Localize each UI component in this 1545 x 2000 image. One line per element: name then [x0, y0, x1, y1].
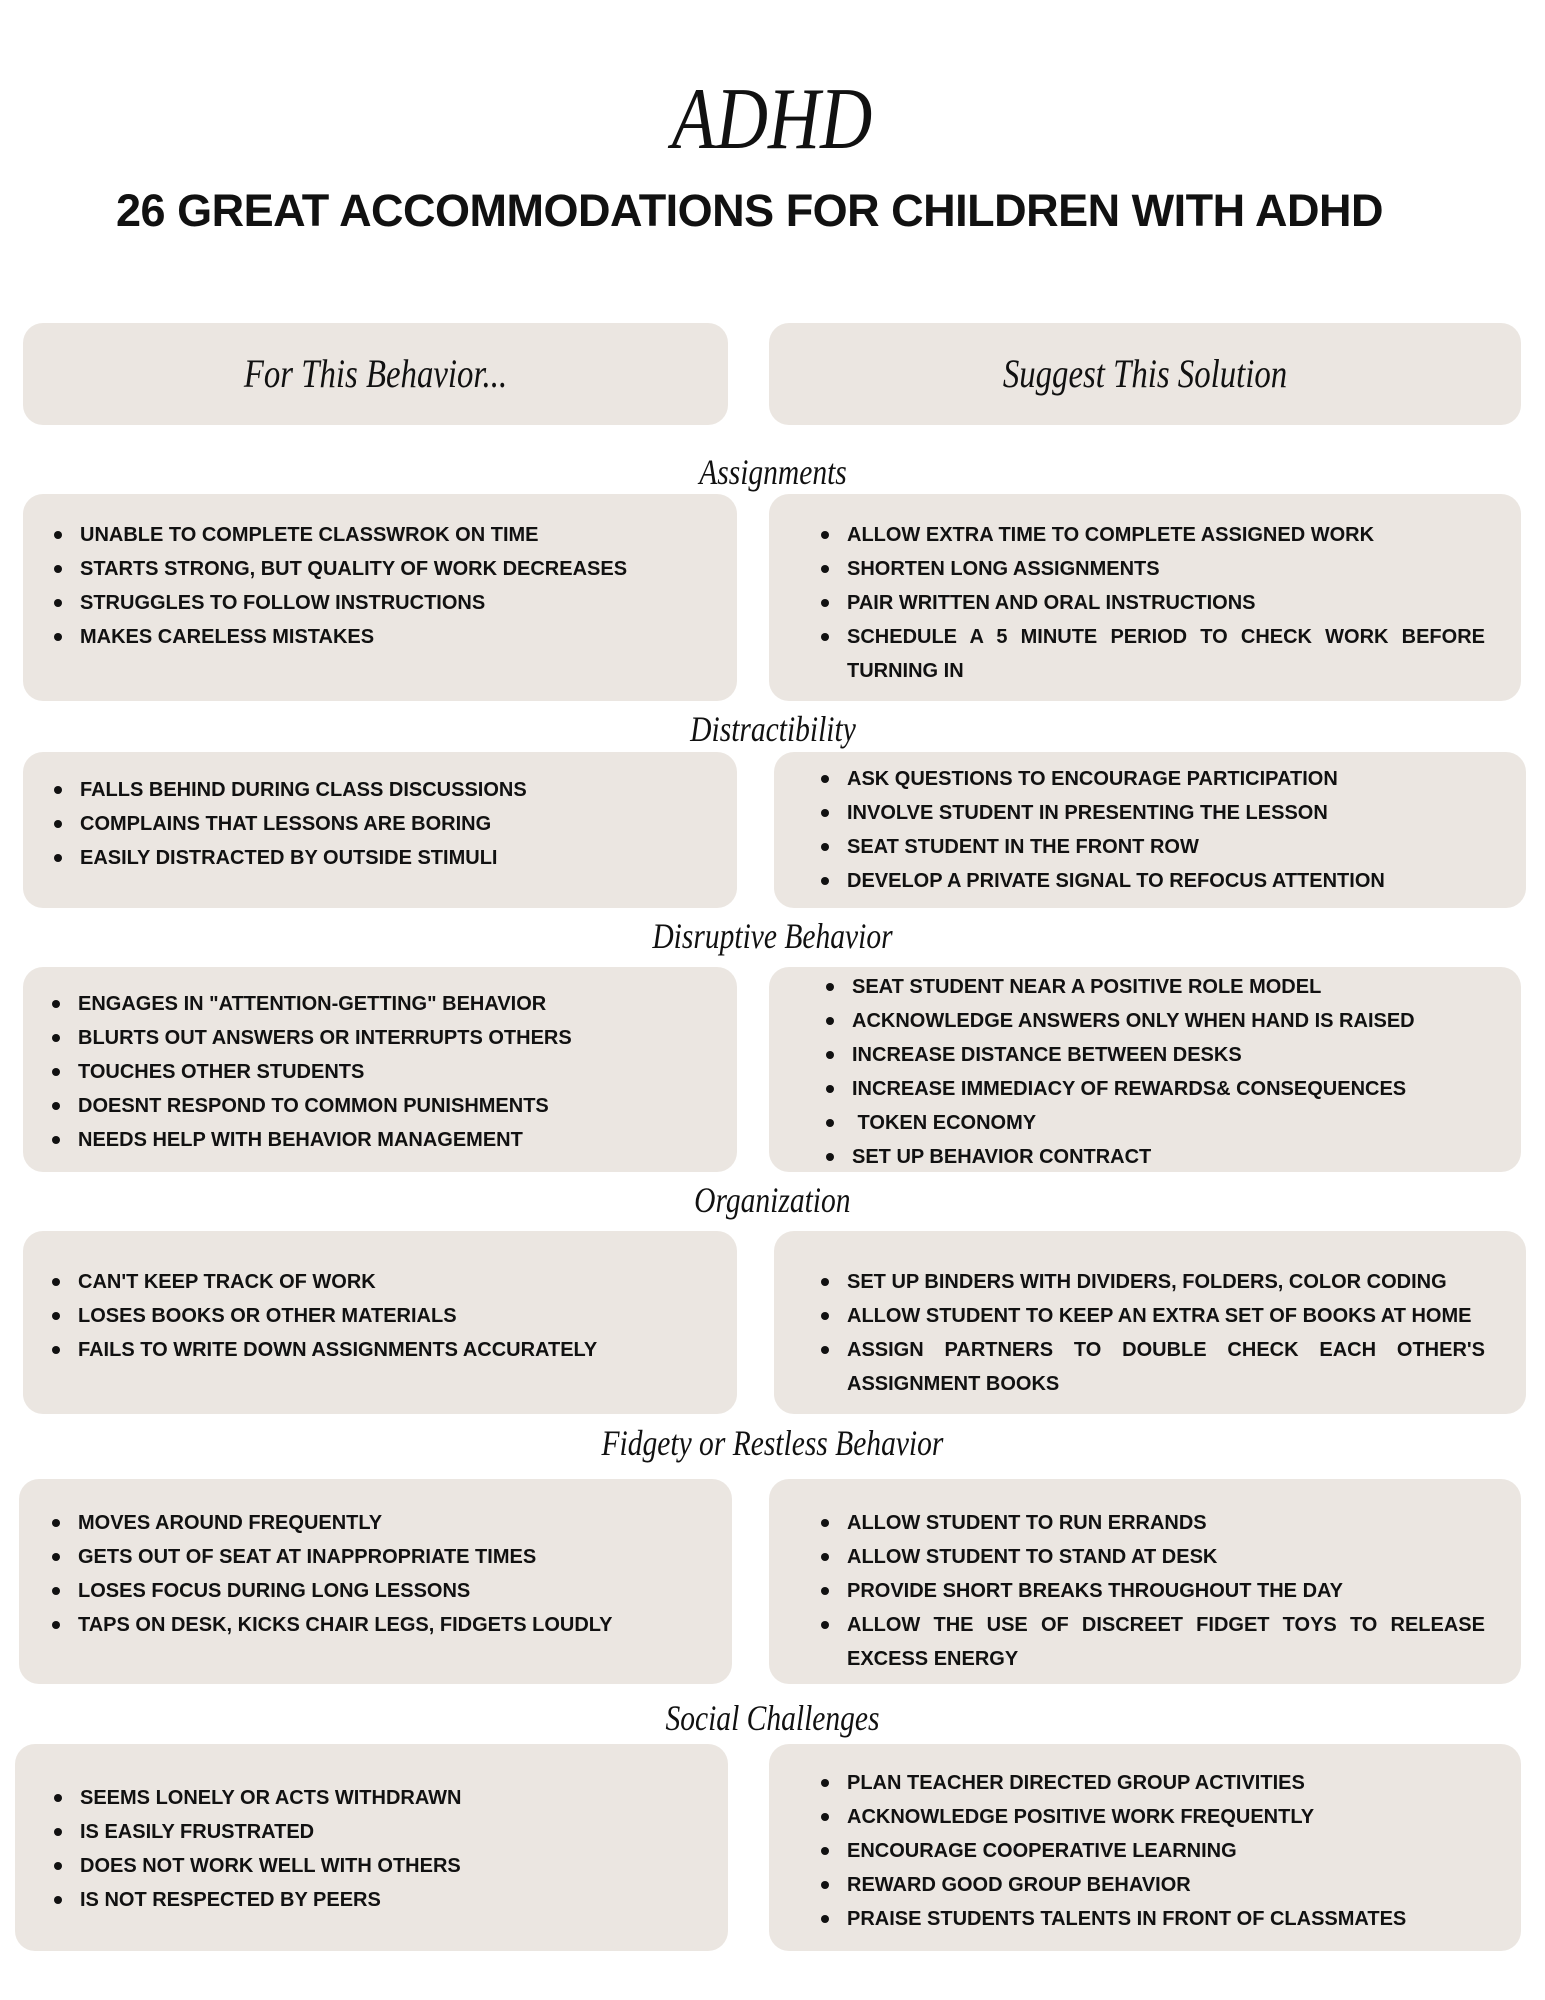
panel: distractibility behaviors: EASILY DISTRACTED BY OUTSIDE STIMULI	[80, 847, 497, 869]
panel: disruptive behaviors: DOESNT RESPOND TO COMMON PUNISHMENTS	[78, 1095, 549, 1117]
panel: organization solutions: ALLOW STUDENT TO KEEP AN EXTRA SET OF BOOKS AT HOME	[847, 1305, 1471, 1327]
panel: assignments solutions: PAIR WRITTEN AND ORAL INSTRUCTIONS	[847, 592, 1256, 614]
panel: assignments behaviors: STARTS STRONG, BUT QUALITY OF WORK DECREASES	[80, 558, 627, 580]
panel: fidgety behaviors: LOSES FOCUS DURING LONG LESSONS	[78, 1580, 470, 1602]
subtitle: 26 GREAT ACCOMMODATIONS FOR CHILDREN WITH ADHD	[116, 185, 1383, 236]
panel: distractibility behaviors: FALLS BEHIND DURING CLASS DISCUSSIONS	[80, 779, 527, 801]
panel: social solutions: REWARD GOOD GROUP BEHAVIOR	[847, 1874, 1191, 1896]
panel: fidgety behaviors: GETS OUT OF SEAT AT INAPPROPRIATE TIMES	[78, 1546, 536, 1568]
panel: social behaviors	[15, 1744, 728, 1951]
panel: social behaviors: IS EASILY FRUSTRATED	[80, 1821, 314, 1843]
panel: distractibility solutions: INVOLVE STUDENT IN PRESENTING THE LESSON	[847, 802, 1328, 824]
panel: social solutions: ACKNOWLEDGE POSITIVE WORK FREQUENTLY	[847, 1806, 1314, 1828]
panel: disruptive solutions: SET UP BEHAVIOR CONTRACT	[852, 1146, 1151, 1168]
section label: Distractibility: Distractibility	[690, 709, 855, 749]
panel: assignments behaviors	[23, 494, 737, 701]
panel: organization behaviors: LOSES BOOKS OR OTHER MATERIALS	[78, 1305, 457, 1327]
panel: fidgety solutions: ALLOW THE USE OF DISCREET FIDGET TOYS TO RELEASE EXCESS ENERGY	[847, 1614, 1485, 1670]
panel: assignments behaviors: UNABLE TO COMPLETE CLASSWROK ON TIME	[80, 524, 539, 546]
panel: organization behaviors: FAILS TO WRITE DOWN ASSIGNMENTS ACCURATELY	[78, 1339, 597, 1361]
panel: disruptive behaviors: ENGAGES IN "ATTENTION-GETTING" BEHAVIOR	[78, 993, 546, 1015]
panel: assignments behaviors: MAKES CARELESS MISTAKES	[80, 626, 374, 648]
header: Suggest This Solution	[769, 323, 1521, 425]
section label: Disruptive Behavior: Disruptive Behavior	[652, 916, 893, 956]
panel: fidgety solutions	[769, 1479, 1521, 1684]
panel: social behaviors: SEEMS LONELY OR ACTS WITHDRAWN	[80, 1787, 462, 1809]
panel: fidgety behaviors	[19, 1479, 732, 1684]
panel: organization solutions: SET UP BINDERS WITH DIVIDERS, FOLDERS, COLOR CODING	[847, 1271, 1447, 1293]
panel: distractibility behaviors	[23, 752, 737, 908]
panel: fidgety solutions: ALLOW STUDENT TO STAND AT DESK	[847, 1546, 1217, 1568]
panel: fidgety behaviors: TAPS ON DESK, KICKS CHAIR LEGS, FIDGETS LOUDLY	[78, 1614, 612, 1636]
panel: distractibility solutions	[774, 752, 1526, 908]
panel: disruptive solutions: SEAT STUDENT NEAR A POSITIVE ROLE MODEL	[852, 976, 1321, 998]
section label: Assignments: Assignments	[699, 452, 846, 492]
panel: assignments solutions: SCHEDULE A 5 MINUTE PERIOD TO CHECK WORK BEFORE TURNING IN	[847, 626, 1485, 682]
panel: organization solutions	[774, 1231, 1526, 1414]
panel: fidgety solutions: ALLOW STUDENT TO RUN ERRANDS	[847, 1512, 1207, 1534]
header: For This Behavior: For This Behavior...	[244, 351, 507, 396]
panel: disruptive solutions: TOKEN ECONOMY	[858, 1112, 1036, 1134]
panel: disruptive behaviors: BLURTS OUT ANSWERS OR INTERRUPTS OTHERS	[78, 1027, 572, 1049]
panel: disruptive solutions	[769, 967, 1521, 1172]
panel: social behaviors: DOES NOT WORK WELL WITH OTHERS	[80, 1855, 461, 1877]
panel: fidgety behaviors: MOVES AROUND FREQUENTLY	[78, 1512, 382, 1534]
panel: disruptive solutions: ACKNOWLEDGE ANSWERS ONLY WHEN HAND IS RAISED	[852, 1010, 1415, 1032]
panel: organization solutions: ASSIGN PARTNERS TO DOUBLE CHECK EACH OTHER'S ASSIGNMENT BOOKS	[847, 1339, 1485, 1395]
panel: assignments solutions: SHORTEN LONG ASSIGNMENTS	[847, 558, 1160, 580]
section label: Organization: Organization	[694, 1180, 851, 1220]
section label: Fidgety or Restless Behavior: Fidgety or Restless Behavior	[602, 1423, 943, 1463]
panel: disruptive behaviors: NEEDS HELP WITH BEHAVIOR MANAGEMENT	[78, 1129, 523, 1151]
panel: distractibility solutions: SEAT STUDENT IN THE FRONT ROW	[847, 836, 1199, 858]
panel: distractibility solutions: ASK QUESTIONS TO ENCOURAGE PARTICIPATION	[847, 768, 1338, 790]
panel: assignments behaviors: STRUGGLES TO FOLLOW INSTRUCTIONS	[80, 592, 485, 614]
header: Suggest This Solution: Suggest This Solution	[1003, 351, 1287, 396]
panel: social solutions	[769, 1744, 1521, 1951]
panel: assignments solutions: ALLOW EXTRA TIME TO COMPLETE ASSIGNED WORK	[847, 524, 1374, 546]
panel: organization behaviors: CAN'T KEEP TRACK OF WORK	[78, 1271, 376, 1293]
panel: disruptive behaviors	[23, 967, 737, 1172]
panel: social solutions: ENCOURAGE COOPERATIVE LEARNING	[847, 1840, 1237, 1862]
panel: distractibility solutions: DEVELOP A PRIVATE SIGNAL TO REFOCUS ATTENTION	[847, 870, 1385, 892]
panel: fidgety solutions: PROVIDE SHORT BREAKS THROUGHOUT THE DAY	[847, 1580, 1343, 1602]
panel: social behaviors: IS NOT RESPECTED BY PEERS	[80, 1889, 381, 1911]
panel: social solutions: PLAN TEACHER DIRECTED GROUP ACTIVITIES	[847, 1772, 1305, 1794]
panel: disruptive solutions: INCREASE DISTANCE BETWEEN DESKS	[852, 1044, 1242, 1066]
title: ADHD: ADHD	[672, 71, 872, 168]
panel: social solutions: PRAISE STUDENTS TALENTS IN FRONT OF CLASSMATES	[847, 1908, 1406, 1930]
panel: assignments solutions	[769, 494, 1521, 701]
panel: disruptive solutions: INCREASE IMMEDIACY OF REWARDS& CONSEQUENCES	[852, 1078, 1406, 1100]
panel: disruptive behaviors: TOUCHES OTHER STUDENTS	[78, 1061, 364, 1083]
section label: Social Challenges: Social Challenges	[666, 1698, 879, 1738]
panel: distractibility behaviors: COMPLAINS THAT LESSONS ARE BORING	[80, 813, 491, 835]
header: For This Behavior	[23, 323, 728, 425]
panel: organization behaviors	[23, 1231, 737, 1414]
